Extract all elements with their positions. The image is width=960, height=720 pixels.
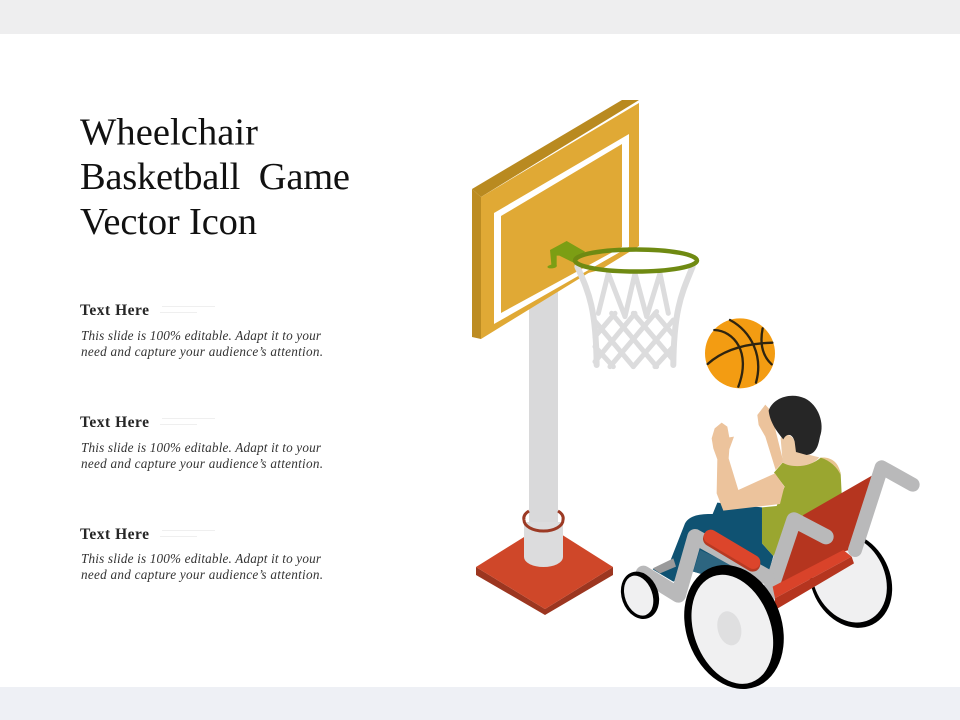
hair <box>769 396 822 455</box>
frame <box>643 467 913 595</box>
icon: backboard <box>472 100 639 339</box>
icon: hoop net <box>577 267 693 367</box>
near arm and hand <box>712 423 784 511</box>
bottom band <box>0 687 960 720</box>
text block 2 <box>80 414 323 471</box>
top band <box>0 0 960 34</box>
trousers <box>653 503 773 582</box>
text block 3: This slide is 100% editable. Adapt it to your <box>81 551 322 566</box>
text block 3 <box>80 526 323 582</box>
text block 3: need and capture your audience’s attention. <box>81 567 323 582</box>
title: Wheelchair <box>80 112 258 154</box>
icon: hoop rim <box>575 250 697 272</box>
title: Basketball Game <box>80 156 350 198</box>
icon: basketball pole <box>524 290 563 567</box>
icon: person in wheelchair <box>614 396 913 703</box>
shoulder shade <box>821 458 841 475</box>
rear wheel <box>794 518 908 642</box>
icon: hoop bracket <box>547 241 585 268</box>
text block 2: need and capture your audience’s attention. <box>81 456 323 471</box>
title <box>80 112 350 243</box>
text block 2: Text Here <box>80 414 149 431</box>
text block 1: need and capture your audience’s attention. <box>81 344 323 359</box>
armrest <box>711 537 753 564</box>
front wheel <box>667 551 801 703</box>
seat back <box>773 471 881 588</box>
lap shadow <box>693 550 763 590</box>
text block 1: Text Here <box>80 302 149 319</box>
text block 2: This slide is 100% editable. Adapt it to your <box>81 440 322 455</box>
seat cushion <box>773 550 854 611</box>
footrest <box>653 558 676 573</box>
raised far arm <box>757 405 783 470</box>
text block 3: Text Here <box>80 526 149 543</box>
icon: basketball stand base <box>476 524 613 615</box>
shirt <box>762 458 842 556</box>
title: Vector Icon <box>80 201 257 243</box>
neck and ear <box>781 435 819 466</box>
text block 1: This slide is 100% editable. Adapt it to your <box>81 328 322 343</box>
text block 1 <box>80 302 323 359</box>
caster wheel <box>614 566 666 624</box>
icon: basketball <box>705 318 775 388</box>
